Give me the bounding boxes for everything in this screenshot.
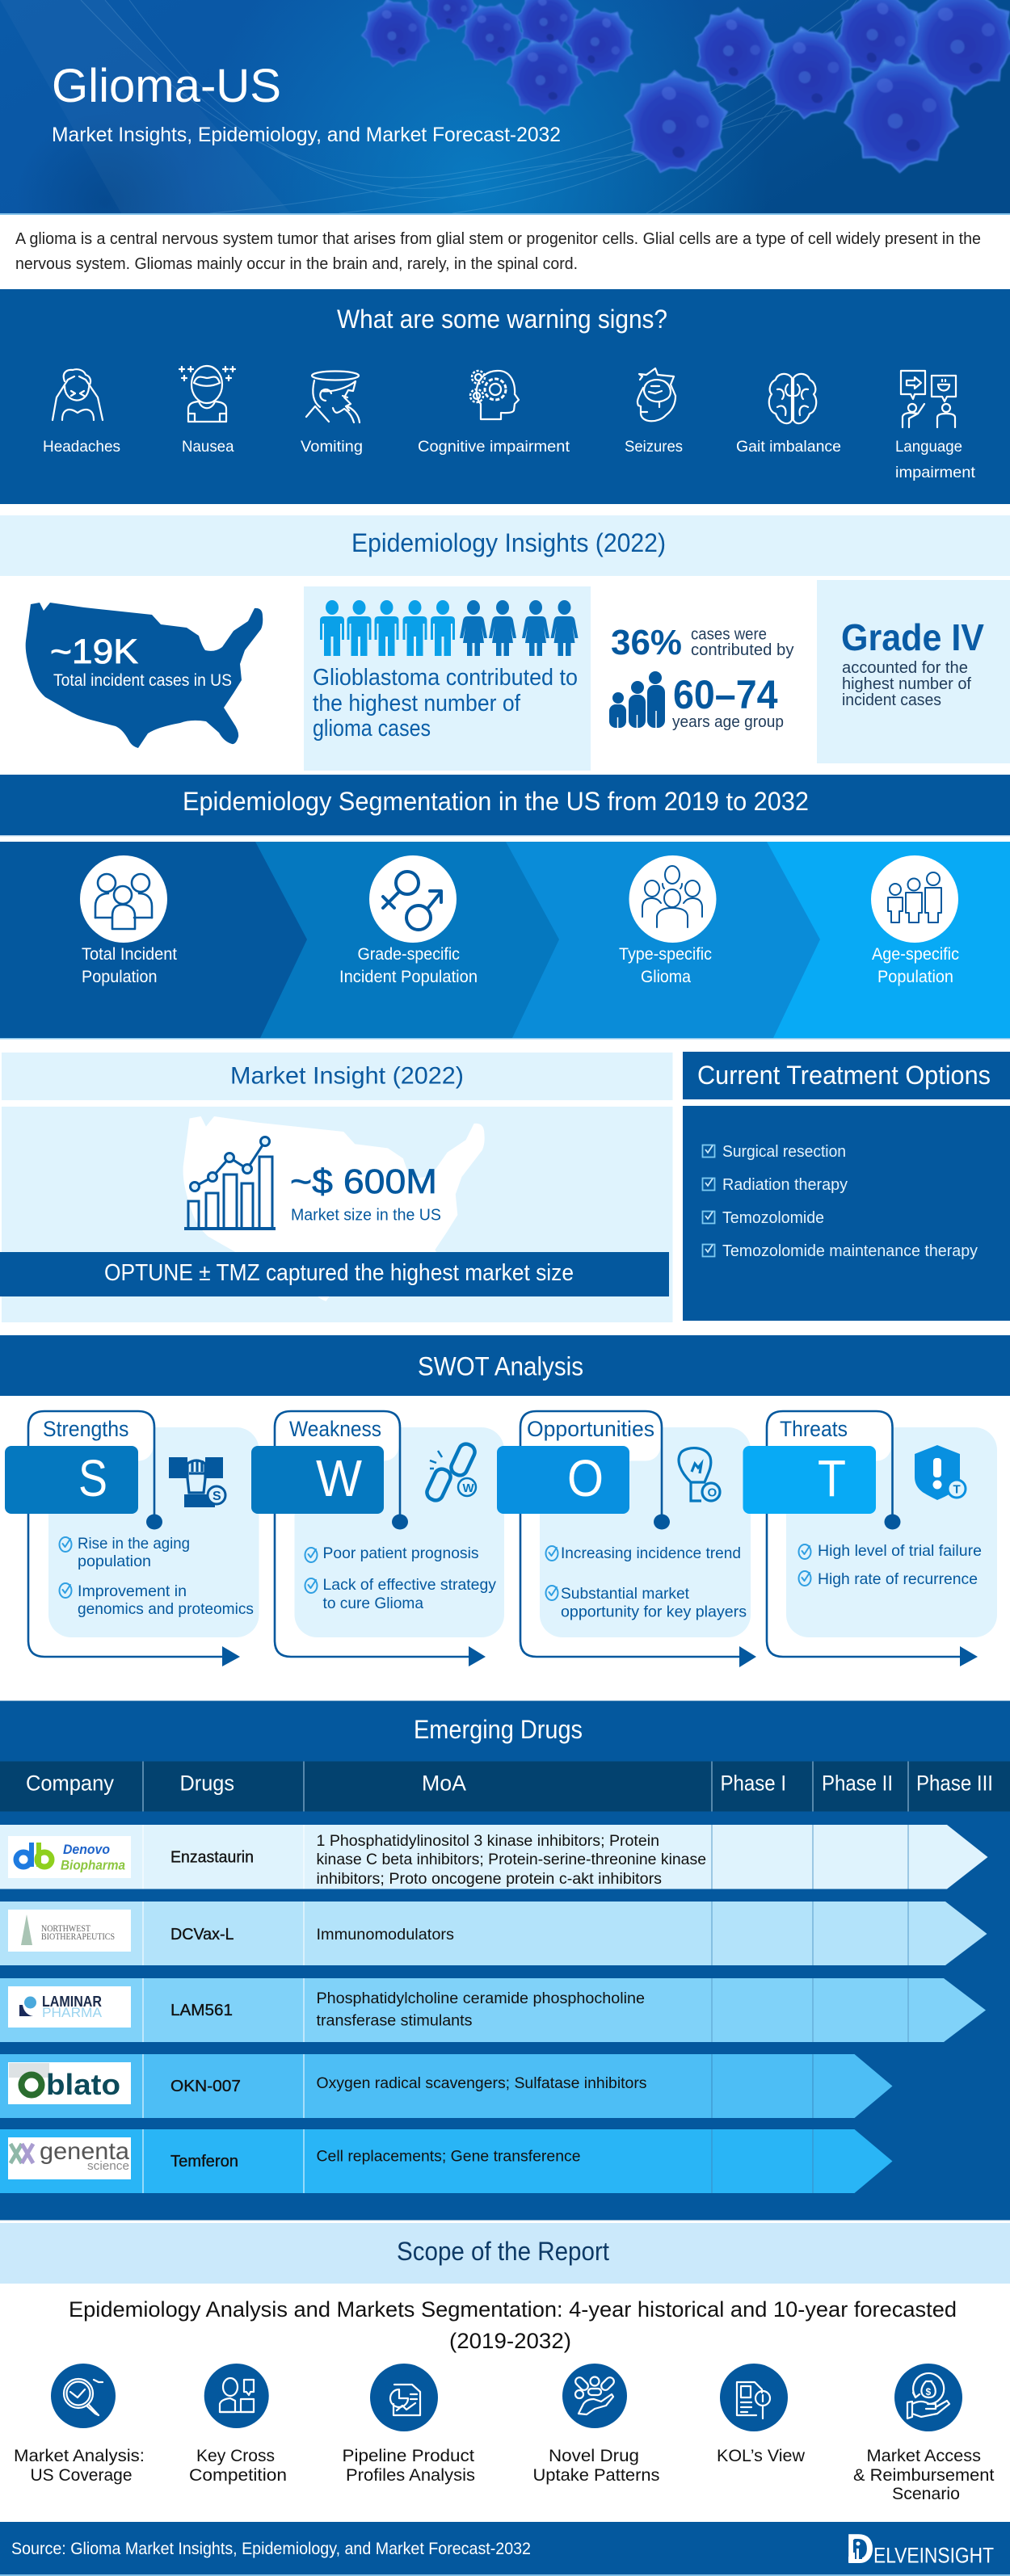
banner: OPTUNE: OPTUNE ± TMZ captured the highest market size	[104, 1260, 574, 1286]
scope item: pipeline product profiles: Pipeline Product	[343, 2446, 474, 2465]
logo: Oblato: blato	[46, 2068, 120, 2101]
icon: family	[609, 671, 665, 728]
text: glioblastoma statement: the highest number of	[313, 691, 520, 716]
scope item: market access and reimbursement: Scenario	[892, 2484, 960, 2503]
list: weakness: to cure Glioma	[323, 1595, 423, 1612]
scope item: novel drug uptake patterns: Uptake Patterns	[533, 2465, 659, 2485]
row: Enzastaurin: inhibitors; Proto oncogene protein c-akt inhibitors	[317, 1871, 662, 1888]
panel: weakness: W	[462, 1481, 475, 1495]
stat: 36 percent age group: 60–74	[673, 672, 778, 717]
text block: glioma definition	[15, 230, 981, 273]
row: OKN-007: OKN-007	[170, 2078, 241, 2095]
logo: Oblato	[8, 2062, 131, 2104]
stat: 36 percent age group: years age group	[672, 713, 784, 731]
text block: glioma definition: nervous system. Gliomas mainly occur in the brain and, rarely, in the spinal cord.	[15, 255, 578, 273]
text block: scope subheading: (2019-2032)	[449, 2329, 571, 2353]
text: glioblastoma statement: Glioblastoma contributed to	[313, 665, 578, 691]
logo: Laminar Pharma	[8, 1986, 131, 2028]
row: LAM561	[0, 1978, 986, 2042]
logo: Laminar Pharma: PHARMA	[42, 2005, 103, 2020]
labels: warning signs: impairment	[895, 464, 976, 481]
logo: Northwest Biotherapeutics: BIOTHERAPEUTICS	[41, 1932, 115, 1942]
panel: weakness	[251, 1411, 504, 1666]
row: OKN-007: Oxygen radical scavengers; Sulfatase inhibitors	[317, 2075, 646, 2092]
labels: warning signs: Language	[895, 438, 962, 456]
icon: warning shield	[915, 1445, 966, 1500]
table header: Phase II	[822, 1771, 893, 1795]
icon: headaches	[53, 369, 103, 420]
segment: age-specific population: Age-specific	[872, 945, 959, 964]
logo: Denovo Biopharma: Denovo	[63, 1842, 110, 1857]
panel: market insight	[0, 1053, 672, 1322]
row: OKN-007	[0, 2054, 892, 2118]
heading band: scope of the report	[0, 2223, 1010, 2284]
panel: threats	[743, 1411, 997, 1666]
stat: US incident cases map	[26, 603, 263, 748]
icon: broken chain	[424, 1442, 478, 1502]
panel: epidemiology insights header: Epidemiology Insights (2022)	[351, 528, 666, 557]
panel: warning signs	[0, 289, 1010, 504]
panel: Grade IV: Grade IV	[841, 616, 984, 658]
list: weakness: Lack of effective strategy	[323, 1576, 496, 1594]
segment: grade-specific	[339, 855, 478, 986]
scope item: key cross competition	[189, 2364, 287, 2485]
icon: fist	[169, 1457, 225, 1507]
panel: strengths: Strengths	[43, 1417, 129, 1441]
heading: warning signs: What are some warning signs?	[337, 305, 667, 334]
heading: treatment: Current Treatment Options	[697, 1061, 991, 1090]
segment: type-specific glioma: Glioma	[641, 968, 691, 986]
icon: warning shield: T	[953, 1483, 961, 1496]
illustration: glioma cells	[356, 0, 1010, 192]
list: weakness	[305, 1544, 496, 1612]
list: threats: High rate of recurrence	[818, 1570, 978, 1588]
segment: type-specific glioma: Type-specific	[619, 945, 712, 964]
scope item: pipeline product profiles	[343, 2364, 475, 2485]
table header: MoA	[422, 1771, 466, 1795]
text: glioblastoma statement	[313, 665, 578, 742]
panel: epidemiology insights header	[0, 515, 1010, 576]
scope item: novel drug uptake patterns: Novel Drug	[549, 2446, 639, 2465]
logo: Genenta Science: science	[87, 2159, 129, 2173]
segment: total incident population: Population	[82, 968, 157, 986]
logo: DelveInsight: D	[846, 2526, 874, 2573]
row: Enzastaurin: Enzastaurin	[170, 1848, 254, 1866]
panel: market insight: ~$ 600M	[290, 1162, 437, 1201]
icon: light bulb	[679, 1448, 720, 1501]
scope item: market analysis	[14, 2364, 145, 2485]
stat: 36 percent age group: 36%	[611, 623, 682, 662]
table header	[0, 1761, 1010, 1811]
title: Glioma-US	[52, 60, 281, 112]
row: Enzastaurin: kinase C beta inhibitors; Protein-serine-threonine kinase	[317, 1851, 706, 1868]
row: LAM561: Phosphatidylcholine ceramide phosphocholine	[317, 1990, 645, 2007]
row: LAM561: LAM561	[170, 2002, 233, 2019]
heading band: SWOT: SWOT Analysis	[418, 1352, 583, 1381]
logo: DelveInsight	[846, 2526, 994, 2573]
segment: age-specific population	[871, 855, 959, 986]
icon: cognitive impairment	[470, 371, 519, 419]
table header: Company	[26, 1771, 114, 1795]
panel: weakness: Weakness	[289, 1417, 381, 1441]
segment: grade-specific: Grade-specific	[357, 945, 460, 964]
panel: market insight: Market size in the US	[291, 1207, 441, 1225]
logo: Northwest Biotherapeutics: NORTHWEST	[41, 1923, 91, 1934]
labels: warning signs: Nausea	[182, 438, 234, 456]
labels: warning signs	[43, 438, 976, 481]
icon: brain, gait imbalance	[769, 374, 816, 423]
icon: language impairment	[901, 371, 956, 427]
footer	[0, 2522, 1010, 2576]
scope item: market access and reimbursement: $	[926, 2386, 931, 2397]
panel: glioblastoma	[304, 586, 591, 771]
list: opportunities	[546, 1544, 747, 1620]
list: strengths	[60, 1535, 254, 1618]
panel: opportunities	[497, 1411, 756, 1667]
heading band: epidemiology segmentation	[0, 775, 1010, 837]
row: DCVax-L: Immunomodulators	[317, 1927, 454, 1944]
row: Temferon: Temferon	[170, 2153, 238, 2170]
segment: total incident population: Total Incident	[82, 945, 177, 964]
panel: emerging drugs	[0, 1701, 1010, 2220]
panel: weakness: W	[316, 1449, 363, 1507]
logo: Laminar Pharma: LAMINAR	[42, 1994, 102, 2010]
table header: Drugs	[179, 1771, 234, 1795]
icon: seizures	[638, 368, 675, 421]
panel: threats: Threats	[780, 1417, 848, 1441]
logo: Genenta Science	[8, 2137, 131, 2179]
heading band: SWOT	[0, 1335, 1010, 1396]
scope item: KOL view	[717, 2364, 805, 2465]
panel: Grade IV: highest number of	[842, 675, 971, 693]
stat: US incident cases map: ~19K	[50, 632, 138, 671]
panel: opportunities: O	[567, 1449, 604, 1507]
list: treatments	[703, 1143, 978, 1260]
row: Temferon	[0, 2129, 892, 2193]
heading: market insight: Market Insight (2022)	[230, 1063, 464, 1089]
heading: emerging drugs: Emerging Drugs	[414, 1715, 583, 1744]
scope item: key cross competition: Key Cross	[196, 2446, 275, 2465]
list: strengths: Improvement in	[78, 1582, 187, 1600]
list: opportunities: opportunity for key players	[561, 1603, 747, 1620]
row: Temferon: Cell replacements; Gene transference	[317, 2149, 580, 2165]
text block: scope subheading	[69, 2297, 957, 2353]
scope item: market access and reimbursement: & Reimbursement	[853, 2465, 995, 2485]
scope item: market access and reimbursement	[853, 2364, 995, 2503]
stat: 36 percent age group: cases were	[691, 625, 767, 643]
subtitle: Market Insights, Epidemiology, and Market Forecast-2032	[52, 124, 561, 146]
panel: opportunities: Opportunities	[527, 1417, 654, 1441]
text: glioblastoma statement: glioma cases	[313, 716, 431, 742]
labels: warning signs: Vomiting	[301, 438, 363, 456]
panel: Grade IV	[817, 580, 1010, 763]
panel: strengths: S	[78, 1449, 107, 1507]
list: treatments: Radiation therapy	[722, 1176, 848, 1194]
list: threats: High level of trial failure	[818, 1542, 982, 1560]
list: treatments: Temozolomide maintenance therapy	[722, 1242, 978, 1260]
icon: fist: S	[213, 1490, 221, 1503]
chart icon: market growth	[184, 1137, 276, 1230]
scope item: market analysis: US Coverage	[31, 2465, 133, 2485]
list: opportunities: Substantial market	[561, 1585, 690, 1603]
row: DCVax-L: DCVax-L	[170, 1926, 234, 1944]
logo: Denovo Biopharma	[8, 1836, 131, 1878]
labels: warning signs: Seizures	[625, 438, 683, 456]
stat: 36 percent age group: contributed by	[691, 641, 793, 659]
panel: opportunities: O	[708, 1486, 718, 1499]
scope item: KOL view: KOL’s View	[717, 2446, 805, 2465]
scope item: novel drug uptake patterns	[533, 2364, 659, 2485]
list: strengths: Rise in the aging	[78, 1535, 190, 1553]
list: strengths: population	[78, 1553, 151, 1570]
scope item: market analysis: Market Analysis:	[14, 2446, 145, 2465]
stat: 36 percent age group	[609, 623, 793, 731]
labels: warning signs: Cognitive impairment	[418, 438, 570, 456]
logo: Denovo Biopharma: Biopharma	[61, 1858, 125, 1872]
chart: segmentation chevrons	[0, 842, 1010, 1039]
row: Enzastaurin	[0, 1825, 987, 1889]
table header: Phase III	[916, 1771, 993, 1795]
segment: total incident population	[80, 855, 177, 986]
list: treatments: Surgical resection	[722, 1143, 846, 1161]
table header: Phase I	[721, 1771, 786, 1795]
panel: current treatment options	[683, 1052, 1010, 1321]
row: DCVax-L	[0, 1902, 987, 1965]
banner: OPTUNE	[0, 1252, 669, 1296]
labels: warning signs: Headaches	[43, 438, 120, 456]
row: Enzastaurin: 1 Phosphatidylinositol 3 kinase inhibitors; Protein	[317, 1833, 659, 1850]
panel: Grade IV: incident cases	[842, 691, 941, 709]
logo: Genenta Science: genenta	[40, 2138, 129, 2165]
scope item: key cross competition: Competition	[189, 2465, 287, 2485]
row: LAM561: transferase stimulants	[317, 2013, 472, 2029]
scope item: pipeline product profiles: Profiles Analysis	[346, 2465, 475, 2485]
list: treatments: Temozolomide	[722, 1209, 824, 1227]
list: threats	[798, 1542, 982, 1588]
list: strengths: genomics and proteomics	[78, 1600, 254, 1618]
segment: age-specific population: Population	[877, 968, 953, 986]
scope item: market access and reimbursement: Market Access	[866, 2446, 981, 2465]
panel: hero banner	[0, 0, 1010, 215]
icon: nausea	[179, 366, 235, 422]
segment: type-specific glioma	[619, 855, 716, 986]
heading band: epidemiology segmentation: Epidemiology Segmentation in the US from 2019 to 2032	[183, 787, 809, 816]
icon: vomiting	[306, 372, 360, 422]
list: weakness: Poor patient prognosis	[323, 1544, 479, 1562]
panel: strengths	[5, 1411, 259, 1666]
source line: Source: Glioma Market Insights, Epidemiology, and Market Forecast-2032	[11, 2540, 531, 2558]
labels: warning signs: Gait imbalance	[736, 438, 841, 456]
text block: glioma definition: A glioma is a central nervous system tumor that arises from glial stem or progenitor cells. Glial cells are a type of cell widely present in the	[15, 230, 981, 248]
text block: scope subheading: Epidemiology Analysis and Markets Segmentation: 4-year historical and 10-year forecasted	[69, 2297, 957, 2322]
panel: Grade IV: accounted for the	[842, 659, 968, 677]
list: opportunities: Increasing incidence trend	[561, 1544, 741, 1562]
icon: row of people	[320, 600, 579, 656]
logo: Northwest Biotherapeutics	[8, 1910, 131, 1952]
stat: US incident cases map: Total incident cases in US	[53, 671, 232, 690]
segment: grade-specific: Incident Population	[339, 968, 478, 986]
panel: threats: T	[818, 1449, 846, 1507]
heading band: scope of the report: Scope of the Report	[397, 2237, 609, 2266]
